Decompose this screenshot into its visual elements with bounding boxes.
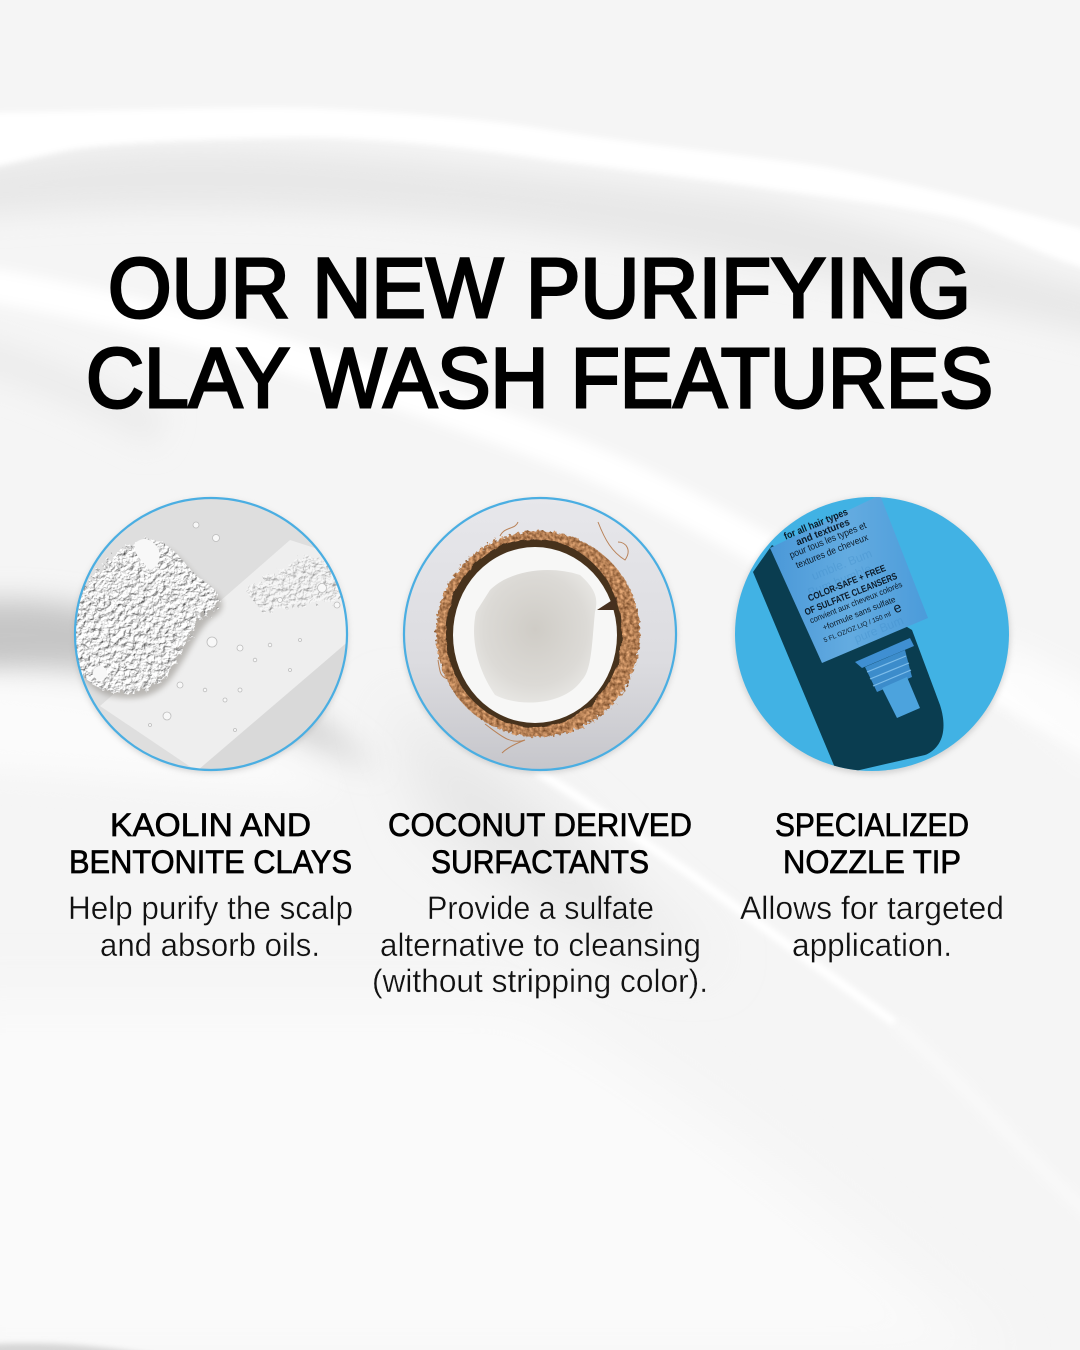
text: clay description: and absorb oils. — [100, 927, 320, 963]
panel: coconut derived surfactants — [372, 498, 708, 999]
text: coconut description: Provide a sulfate — [427, 890, 654, 926]
icon: tube nozzle photo: pour tous les types et — [788, 520, 868, 561]
text: coconut description: alternative to cleansing — [380, 927, 701, 963]
text: coconut description: (without stripping color). — [372, 963, 708, 999]
icon: halved coconut photo — [403, 498, 677, 773]
heading: kaolin and bentonite clays — [69, 807, 352, 880]
panel: kaolin and bentonite clays — [68, 490, 360, 963]
icon: tube nozzle photo: convient aux cheveux colorés — [808, 579, 904, 625]
icon: tube nozzle photo: +formule sans sulfate — [821, 594, 897, 632]
heading: coconut derived surfactants — [388, 807, 692, 880]
icon: tube nozzle photo: umble. Bum — [809, 546, 874, 583]
icon: tube nozzle photo: and textures — [795, 517, 852, 548]
title: CLAY WASH FEATURES — [86, 331, 993, 425]
text: nozzle description: application. — [792, 927, 952, 963]
title — [86, 241, 993, 425]
heading: specialized nozzle tip: SPECIALIZED — [775, 807, 969, 843]
heading: coconut derived surfactants: COCONUT DERIVED — [388, 807, 692, 843]
panel: specialized nozzle tip — [734, 495, 1010, 963]
icon: clay powder photo — [70, 490, 360, 780]
heading: kaolin and bentonite clays: KAOLIN AND — [110, 807, 311, 843]
heading: kaolin and bentonite clays: BENTONITE CLAYS — [69, 844, 352, 880]
heading: specialized nozzle tip — [775, 807, 969, 880]
text: coconut description — [372, 890, 708, 999]
icon: tube nozzle photo — [734, 495, 1010, 775]
text: nozzle description — [740, 890, 1004, 963]
icon: tube nozzle photo: COLOR-SAFE + FREE — [807, 563, 888, 604]
text: clay description: Help purify the scalp — [68, 890, 353, 926]
icon: tube nozzle photo: Bum humble — [806, 561, 874, 600]
text: clay description — [68, 890, 353, 963]
icon: tube nozzle photo: 5 FL OZ/OZ LIQ / 150 ml — [823, 611, 893, 644]
icon: tube nozzle photo: textures de cheveux — [794, 532, 870, 571]
icon: tube nozzle photo: for all hair types — [782, 507, 850, 543]
icon: tube nozzle photo: OF SULFATE CLEANSERS — [803, 571, 899, 618]
text: nozzle description: Allows for targeted — [740, 890, 1004, 926]
icon: tube nozzle photo: pure Bum — [852, 613, 905, 646]
heading: specialized nozzle tip: NOZZLE TIP — [783, 844, 961, 880]
title: OUR NEW PURIFYING — [108, 241, 971, 335]
heading: coconut derived surfactants: SURFACTANTS — [431, 844, 649, 880]
icon: tube nozzle photo: e — [891, 598, 904, 616]
